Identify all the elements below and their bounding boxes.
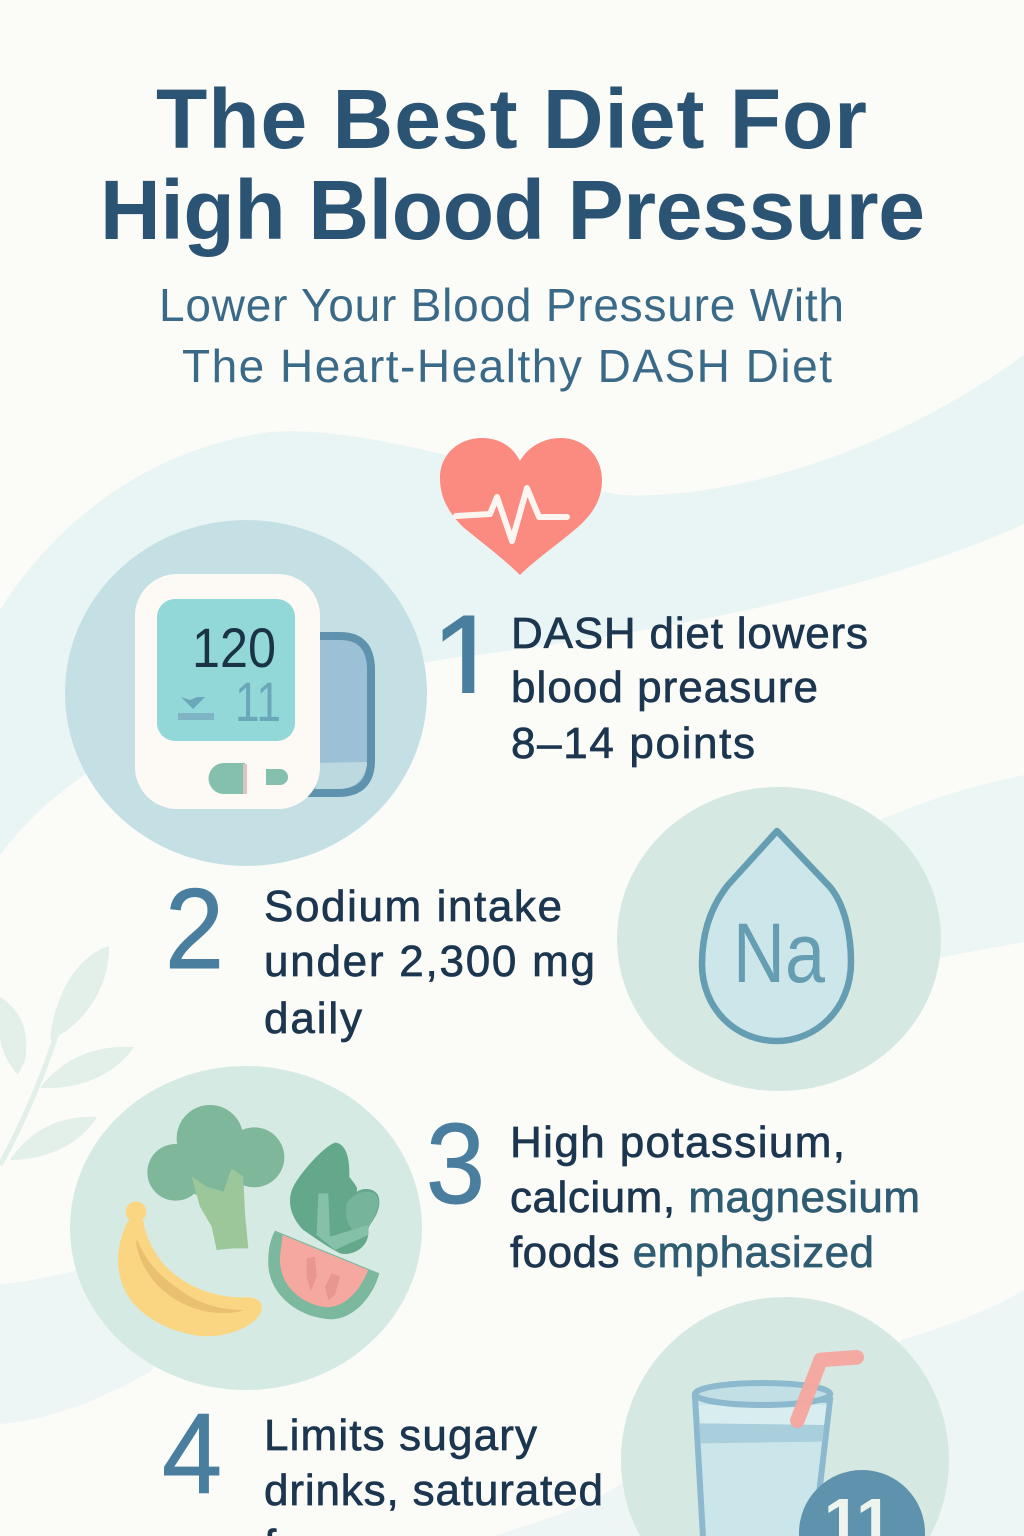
text: item 4: drinks, saturated (264, 1466, 603, 1515)
text: item 3: High potassium, (510, 1118, 845, 1167)
number 2: 2 (165, 866, 224, 993)
text: item 3: foods emphasized (510, 1228, 874, 1277)
subtitle (159, 279, 844, 392)
icon: watermelon slice (268, 1231, 379, 1319)
text: item 4 (264, 1411, 603, 1536)
icon: broccoli (147, 1105, 284, 1250)
title (100, 72, 925, 257)
number 4: 4 (162, 1391, 222, 1518)
text: item 1: 8–14 points (511, 719, 755, 768)
panel: item 4 drink (621, 1297, 949, 1536)
text: item 2: Sodium intake (264, 882, 562, 931)
icon: cuff (305, 636, 371, 793)
title: The Best Diet For (156, 72, 867, 166)
decorative leaf sprig (0, 946, 134, 1165)
icon: monitor body: 11 (235, 670, 281, 733)
text: item 2: daily (264, 994, 362, 1043)
icon: sodium drop: Na (733, 906, 825, 1000)
subtitle: The Heart-Healthy DASH Diet (182, 340, 832, 392)
text: item 1: blood preasure (511, 663, 818, 712)
icon: number badge (799, 1470, 925, 1536)
number 1: 1 (431, 589, 501, 730)
text: item 3: calcium, magnesium (510, 1173, 920, 1222)
panel: item 2 sodium drop (617, 787, 941, 1091)
subtitle: Lower Your Blood Pressure With (159, 279, 844, 331)
text: item 1: DASH diet lowers (511, 609, 868, 658)
text: item 2: under 2,300 mg (264, 937, 595, 986)
text: item 3 (510, 1118, 920, 1277)
title: High Blood Pressure (100, 163, 925, 257)
icon: leafy greens (290, 1143, 379, 1254)
icon: banana (118, 1201, 262, 1336)
icon: sodium drop (702, 831, 851, 1041)
panel: item 1 blood pressure monitor (65, 520, 427, 866)
icon: heart with pulse (440, 438, 602, 575)
panel: item 3 healthy foods (70, 1066, 422, 1390)
icon: monitor body (135, 574, 320, 809)
text: item 1 (511, 609, 868, 768)
icon: monitor body: 120 (192, 616, 276, 679)
text: item 4: Limits sugary (264, 1411, 537, 1460)
icon: glass with straw (695, 1357, 857, 1536)
text: item 2 (264, 882, 595, 1043)
number 3: 3 (426, 1101, 485, 1228)
